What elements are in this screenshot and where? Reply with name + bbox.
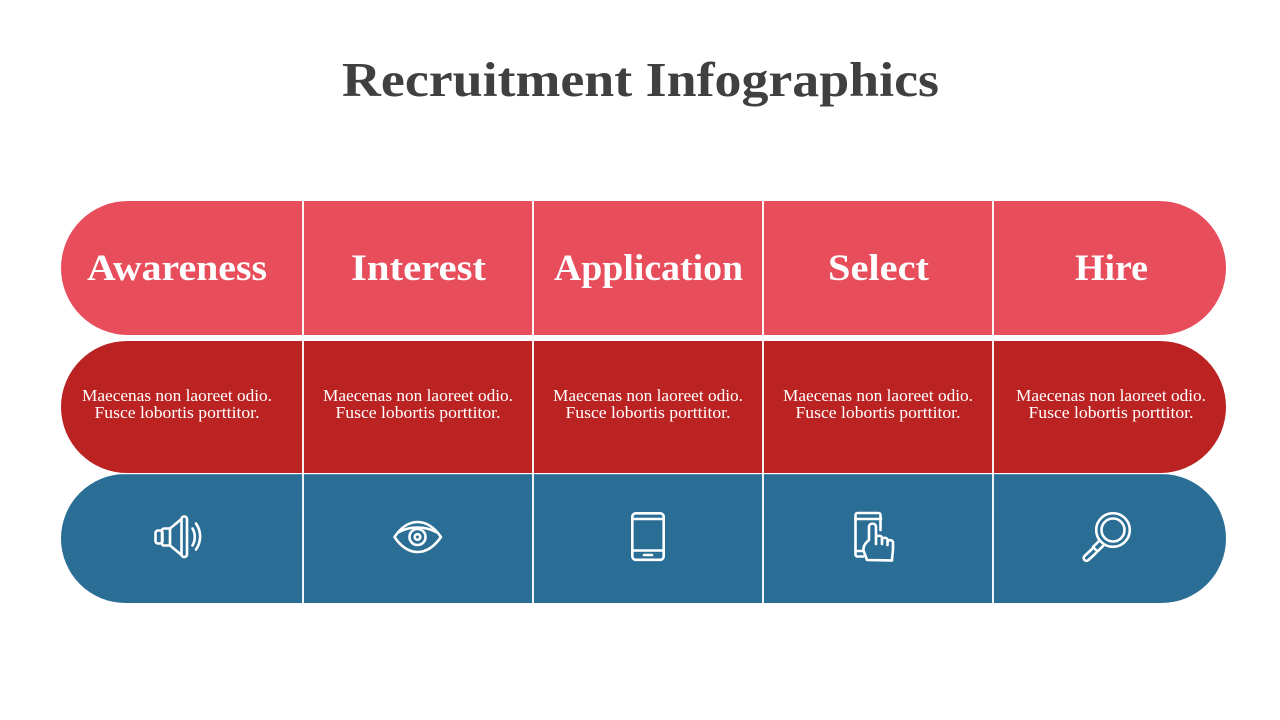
panel: icon band [61, 474, 1226, 603]
text: Hire description [1016, 386, 1206, 422]
blue band background [61, 474, 1226, 603]
panel: header band [61, 201, 1226, 335]
icon: tablet [632, 513, 664, 560]
text: Awareness description: Maecenas non laoreet odio. [82, 386, 272, 405]
text: Awareness description [82, 386, 272, 422]
text: Awareness description: Fusce lobortis porttitor. [94, 403, 260, 422]
heading: Interest: Interest [351, 248, 487, 289]
icon: megaphone speaker [156, 516, 200, 557]
heading: Application: Application [554, 248, 743, 289]
text: Interest description [323, 386, 513, 422]
icon: magnifying glass [1084, 513, 1130, 561]
title: Recruitment Infographics [342, 52, 939, 107]
column dividers [110, 201, 1180, 603]
text: Select description: Maecenas non laoreet odio. [783, 386, 973, 405]
heading: Select: Select [828, 248, 930, 289]
icon: eye [394, 522, 441, 552]
text: Hire description: Fusce lobortis porttitor. [1028, 403, 1194, 422]
text: Hire description: Maecenas non laoreet odio. [1016, 386, 1206, 405]
icon: phone with tapping hand [856, 513, 893, 560]
heading: Hire: Hire [1075, 248, 1148, 289]
heading: Awareness: Awareness [87, 248, 267, 289]
text: Application description: Fusce lobortis porttitor. [566, 403, 730, 422]
text: Application description: Maecenas non laoreet odio. [553, 386, 743, 405]
text: Interest description: Maecenas non laoreet odio. [323, 386, 513, 405]
text: Interest description: Fusce lobortis porttitor. [336, 403, 500, 422]
panel: description band [61, 341, 1226, 473]
pink band background [61, 201, 1226, 335]
text: Application description [553, 386, 743, 422]
text: Select description [783, 386, 973, 422]
text: Select description: Fusce lobortis porttitor. [796, 403, 960, 422]
red band background [61, 341, 1226, 473]
